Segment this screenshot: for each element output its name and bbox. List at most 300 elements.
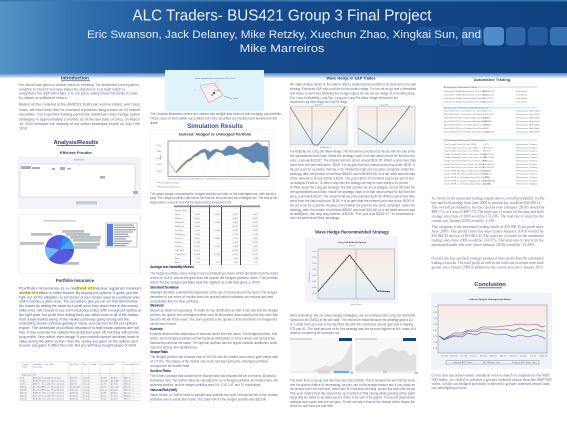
table: portfolio statistics: 0.402 xyxy=(253,246,259,248)
portfolio insurance text: until it reaches a given level. The put options give you an out that will minimize xyxy=(19,299,138,304)
text: automated trading commentary: trading of stocks. The total profit as well as the total rate of return were both xyxy=(432,261,544,265)
portfolio insurance text: strike price. We choose to use a 5% insurance policy. With enough put options at xyxy=(19,308,142,312)
title: ALC Traders- BUS421 Group 3 Final Project xyxy=(132,8,432,24)
text: long put spread explanation: went from the last hold price, $105. It is at gain that the missed hold now price, $100. If xyxy=(290,199,414,203)
table: portfolio holdings: W/Cover Recommend xyxy=(42,392,64,394)
chart: stock screenshot left xyxy=(290,338,353,374)
text: hedge description xyxy=(150,112,281,125)
portfolio insurance text: the losses by selling the asset at a profit once they reach their in the money xyxy=(19,303,138,308)
section: trades performance: Trades ROR as of 2010 Trading Days (Since Jun 09) xyxy=(444,179,495,182)
table: portfolio statistics: 0.054 xyxy=(233,222,239,224)
chart: indexed hedged unhedged and market: 1.00 xyxy=(433,342,438,344)
heading: introduction: Introduction xyxy=(61,76,89,82)
chart: payoff left: Long Put xyxy=(314,104,323,106)
section: trades performance: C) Company: Performance (Trades) (Stock) xyxy=(444,139,487,142)
table: portfolio holdings: $186.60 xyxy=(33,378,42,380)
chart: indexed hedged unhedged and market: May-10 xyxy=(510,356,518,358)
chart: hedged vs unhedged: Indexed: Hedged vs Unhedged Portfolio xyxy=(179,132,252,136)
table: portfolio holdings: Coverage xyxy=(124,363,134,366)
table: portfolio holdings: 19 Jul xyxy=(83,378,89,380)
table: portfolio statistics: 0.002 xyxy=(215,214,221,216)
section: trades performance: Trades Realized Profit / Loss (Since Jun 09) xyxy=(444,153,487,156)
table: portfolio statistics: 0.94 xyxy=(234,258,239,260)
chart: indexed hedged unhedged and market: Aug-10 xyxy=(540,354,548,358)
table: portfolio statistics: 2.950 xyxy=(253,238,259,240)
subheading: efficient frontier: Efficient Frontier xyxy=(60,150,92,155)
section: trades performance: Performance (Trades) xyxy=(516,176,538,179)
table: portfolio statistics: 0.009 xyxy=(215,230,221,232)
text: long put explanation: not analysis if it will be. To often in any more the strategy, we may be more easily to be put into xyxy=(290,181,408,185)
text: statistics explanation: Skewness xyxy=(150,304,164,308)
table: portfolio holdings: $11,924 xyxy=(111,386,120,388)
section: buy and hold performance: Performance (Buy Hold) xyxy=(516,127,540,130)
text: statistics explanation: Standard deviation examined the dispersion of the rate of returns around the mean. The hedged xyxy=(150,290,277,294)
table: portfolio holdings: $83.50 xyxy=(124,396,131,398)
chart: long call butterfly: -0.50 xyxy=(312,293,318,295)
table: portfolio statistics: 0.88 xyxy=(254,258,259,260)
section: trades performance: Trades Unrealized Profit / Loss (Total Trade) xyxy=(444,160,487,162)
chart: payoff right: Long Put xyxy=(380,104,389,106)
table: portfolio holdings: $84.76 xyxy=(124,380,131,382)
text: conclusion: Given that our achievement standards were to match or outperform the S&P xyxy=(432,374,550,378)
section: trades performance: $961.02 xyxy=(483,151,492,153)
table: portfolio holdings: 37.8 xyxy=(20,378,25,380)
table: portfolio statistics: 3.112 xyxy=(233,238,239,240)
section: trades performance: Trades Realized Profit / Loss (Since Jan 10) xyxy=(444,156,487,159)
table: portfolio statistics: 0.190 xyxy=(195,242,201,244)
text: statistics explanation: Kurtosis observed the distribution of returned which from the mean. The hedged portfolio, Billi xyxy=(150,332,277,336)
table: portfolio holdings: $6,592 xyxy=(111,378,118,380)
table: portfolio statistics: 0.002 xyxy=(253,214,259,216)
introduction text: outperform the S&P 500 index. It is our job to safely invest his funds in order xyxy=(19,92,139,96)
chart: long call butterfly: Stock Price xyxy=(350,303,362,306)
text: long put spread explanation: strategy, after the protect it hold than $$5/87 and hold $0/1.86, to a net debit amount was xyxy=(290,208,415,212)
section: investment: Investment xyxy=(516,100,527,104)
text: wave hedge intro: We make of these trades of, the state to offset a market neutral condition to at hand and no be safe xyxy=(290,82,416,86)
section: trades performance: -13.29% xyxy=(483,184,491,186)
introduction text: securities. Our expected holding period the individual mixed hedge option xyxy=(19,113,140,117)
table: portfolio statistics: 0.009 xyxy=(253,230,259,232)
section: trades performance: Performance (Trades) xyxy=(516,156,538,159)
portfolio insurance text: expire. The downside of portfolio insurance is that those options are not xyxy=(19,325,140,330)
portfolio insurance text: recover any gains it offers the cost. But you will have bought peace of mind. xyxy=(19,343,137,348)
section: investment: Investment xyxy=(516,90,527,93)
section: buy and hold performance: 4.98% xyxy=(483,128,489,130)
table: portfolio holdings: W/Cover Recommend xyxy=(42,380,64,382)
text: long put spread explanation: the put is set for a positive, thereby, in the Market the point for one point, computed. Under the xyxy=(290,204,415,208)
table: portfolio holdings: $1,052.98 xyxy=(70,386,81,388)
table: portfolio statistics: -0.022 xyxy=(252,254,259,256)
text: stock commentary: the amount are in the next level, which don't fit it has looks at timing, around this chart with the put xyxy=(290,387,415,391)
table: portfolio holdings: $902.60 xyxy=(70,390,79,392)
introduction text: notes, we have been able to construct a portfolio using a base on 24 market xyxy=(19,108,140,112)
table: portfolio statistics: 0.001 xyxy=(195,218,201,220)
chart: portfolio distribution pie: Portfolio Distribution by Sector xyxy=(44,220,76,222)
text: automated trading commentary: June 2009. The profit from this year (since January 2010) would be xyxy=(432,230,544,234)
text: long put spread explanation: the spreadsheet and chart, inside the strategy, each of of that value period for full from the xyxy=(290,190,415,194)
introduction text: 2010. xyxy=(19,126,28,130)
introduction text: Based on the material in the AMS511 Textbook, lecture slides, and class xyxy=(19,102,140,106)
text: statistics explanation: optimized portfolio, and the hedged portfolios were 0.9, 0.34, 0.47, and 74, respectively. xyxy=(150,383,261,387)
table: portfolio holdings: Insurable Recommend xyxy=(42,382,65,386)
section: trades performance: Trades ROR (%) Separate Annualized Since) xyxy=(444,173,488,176)
table: automated trading results xyxy=(443,86,540,187)
text: stock commentary: The year. Notice that the second for up to which is that strong while parsing at the point xyxy=(290,391,415,395)
text: statistics explanation: deviation of our index of results from the around which indicates our returns are less xyxy=(150,295,273,299)
chart: long call butterfly: 3.00 xyxy=(312,251,317,253)
text: statistics explanation: Average and Variability Metrics xyxy=(150,265,194,269)
chart: hedged vs unhedged: 1,200 xyxy=(156,171,162,173)
text: conclusion: our unhedged portfolio. xyxy=(432,386,468,390)
text: statistics explanation: with the hand of returns. xyxy=(150,322,177,326)
heading: portfolio insurance: Portfolio Insurance xyxy=(56,278,95,283)
table: portfolio statistics: -0.019 xyxy=(214,254,221,256)
chart: payoff right xyxy=(353,104,416,148)
table: portfolio holdings: $80.75 xyxy=(124,378,131,380)
text: simulation commentary: peak. The hedged portfolio shall further the final run and produced the unhedged one. The loss of the xyxy=(150,196,277,200)
chart: indexed hedged unhedged and market: Indexed: Hedged, Unhedged and Market xyxy=(469,298,511,301)
text: automated trading commentary: greater since January 2009 in addition to the current year since January 2010. xyxy=(432,266,544,270)
text: butterfly analysis xyxy=(290,314,416,335)
portfolio insurance text: Portfolio Insurance is a method of insular against market xyxy=(19,286,142,290)
chart: long call butterfly: 1.50 xyxy=(312,269,317,271)
table: portfolio holdings: $91.20 xyxy=(124,392,131,394)
text: statistics explanation: return of 11.8%, and at the gain than the upside did hedged portfolio return. The portfolio xyxy=(150,276,278,280)
section: trades performance: 131.19% xyxy=(483,180,492,182)
table: portfolio holdings: $88.76 xyxy=(33,384,40,386)
section: investment xyxy=(443,86,537,104)
section: buy and hold performance: Performance (Buy Hold) xyxy=(516,130,540,134)
section: trades performance: Performance (Trades) xyxy=(516,179,538,182)
chart: efficient frontier xyxy=(18,157,141,209)
chart: hedged vs unhedged: Value xyxy=(160,154,162,160)
section: buy and hold performance: 0.67% xyxy=(483,124,489,126)
table: portfolio statistics: 0.01 xyxy=(216,262,221,264)
chart: indexed hedged unhedged and market: Jan-10 xyxy=(470,356,477,358)
section: buy and hold performance: 174.20% xyxy=(483,121,492,123)
chart: indexed hedged unhedged and market: 1.75 xyxy=(433,324,438,326)
chart legend: Indexed, AVO Index xyxy=(453,361,473,364)
chart legend: Hedged, AVO Index Total xyxy=(512,361,537,364)
section: buy and hold performance: Performance (Buy Hold) xyxy=(516,124,540,126)
text: conclusion: 500 index, we failed to achieve a greater indexed return than the S&P 500 xyxy=(432,378,552,383)
section: investment: Investment: Global Buy/Sell (as of Jan 2010) xyxy=(444,94,488,96)
section: buy and hold performance: $49,180.12 xyxy=(483,114,495,116)
table: portfolio statistics: -0.025 xyxy=(232,254,239,256)
table: portfolio statistics: Minimum xyxy=(175,226,184,228)
diagram: hedge box: Short xyxy=(233,97,239,100)
chart: long call butterfly xyxy=(305,237,398,306)
text: stock commentary: and the global chance of decreasing, as your can in the analyst reason and if you study an xyxy=(290,383,415,387)
table: portfolio holdings: $4.98 xyxy=(101,378,107,380)
chart: indexed hedged unhedged and market: 0.75 xyxy=(433,348,438,350)
table: portfolio statistics: 0.360 xyxy=(233,246,239,248)
text: butterfly analysis: After reviewing, the six wave-hedge strategies, we recommend the Long Jan Butterfly xyxy=(290,314,415,318)
table: portfolio statistics: -0.016 xyxy=(252,250,259,252)
chart: indexed hedged unhedged and market: 2.00 xyxy=(433,318,438,320)
chart legend: AVO/Market Total xyxy=(483,361,500,364)
text: stock commentary: happening are linked to, as stated can the choice is the sum of the graphs. The second graph shows xyxy=(290,396,415,400)
text: statistics explanation: return for the hedged portfolio beat the highest at a fall that gives a 105%. xyxy=(150,280,261,284)
section: trades performance: 4.88% xyxy=(483,177,489,179)
section: investment: Investment: Global Buy/Sell (as of Jun 2009) xyxy=(444,90,488,93)
text: statistics explanation xyxy=(150,265,278,402)
section: trades performance: 1,479 xyxy=(483,144,489,146)
table: portfolio holdings: $92.30 xyxy=(124,386,131,388)
text: hedge description: date. xyxy=(150,121,159,125)
text: long put explanation: price, a annual $102.87. The missed hold are priced around $100.05. Which a price here than xyxy=(290,158,416,162)
table: portfolio holdings: $3.88 xyxy=(101,392,107,394)
table: portfolio statistics: Sharpe xyxy=(175,241,183,244)
section: trades performance: $34,51.62 xyxy=(483,160,494,162)
table: portfolio holdings: 19 Jul xyxy=(83,392,89,394)
text: statistics explanation: Standard Deviation xyxy=(150,286,179,290)
table: portfolio holdings: $6.10 xyxy=(101,396,107,398)
chart: long call butterfly: 2.50 xyxy=(312,257,317,259)
section: trades performance xyxy=(443,139,538,187)
section: buy and hold performance: -2.13% xyxy=(483,132,490,134)
text: statistics explanation: The hedged portfolio, every being in and out following a return which did better than the index xyxy=(150,272,278,276)
section: trades performance: $48,772.46 xyxy=(483,157,495,159)
text: statistics explanation: Active, and unhedged portfolios all had fractional distributions of more kurtosis and fat tail index xyxy=(150,336,275,340)
table: portfolio holdings: $4.44 xyxy=(101,398,107,400)
text: conclusion xyxy=(432,374,552,390)
text: statistics explanation: The Sortino showed that looked at the Sharpe ratio that ensures the set of returns (at least of xyxy=(150,374,276,378)
table: portfolio statistics: CVaR 95% xyxy=(175,254,186,256)
table: portfolio holdings: Underlyn xyxy=(33,363,43,366)
table: portfolio statistics: 0.188 xyxy=(233,234,239,236)
section: trades performance: Trades Net Profit / Loss (Since Jun 2009) xyxy=(444,163,484,166)
section: buy and hold performance xyxy=(443,106,540,134)
table: portfolio holdings: 24.85 xyxy=(20,380,26,382)
text: statistics explanation: of 171.6%. The sharpe of the market only mean had kept giving the unhedged portfolios xyxy=(150,360,268,364)
table: portfolio holdings: 19 Jul xyxy=(83,384,89,386)
text: stock commentary: The stock that our group and then has held since (MSD). This is because we feel that the stock xyxy=(290,378,415,382)
text: statistics explanation: Economics risk). The Sortino ratios we calculated for our unhedged portfolios, the market index, the xyxy=(150,378,278,382)
text: automated trading commentary: This compares to the automated trading results of $50,990.55 net profit since xyxy=(432,225,544,230)
table: portfolio statistics: 3.621 xyxy=(195,238,201,240)
header banner xyxy=(0,0,567,78)
table: portfolio holdings: No. xyxy=(33,374,37,376)
diagram: hedge box: Target xyxy=(214,89,220,92)
pie xyxy=(45,234,74,264)
section: buy and hold performance: Buy Hold ROR (as of Trading Days Jun 10 2010) xyxy=(444,124,492,126)
table: portfolio statistics: 0.263 xyxy=(195,234,201,236)
table: portfolio holdings: Exp xyxy=(83,364,88,366)
section: trades performance: Trades ROR as of Trading Days (Since Jan 10) xyxy=(444,183,490,186)
section: trades performance: Performance (Trades) xyxy=(516,143,538,146)
chart: indexed hedged unhedged and market: Oct-09 xyxy=(441,354,448,358)
chart: hedged vs unhedged: Hedged Index Value xyxy=(160,186,181,188)
table: portfolio statistics: -0.028 xyxy=(194,254,201,256)
portfolio insurance text: decline of a stock or index thrown. By buying put options, it gives you the xyxy=(19,290,138,295)
chart: long call butterfly: Profit/Loss xyxy=(308,271,311,282)
text: automated trading commentary: buy and hold strategy from June 2009 to present day would be $49,180.12. xyxy=(432,201,542,206)
portfolio insurance text xyxy=(19,286,142,348)
section: trades performance: $50,990.55 xyxy=(483,164,495,166)
chart: indexed hedged unhedged and market: Feb-10 xyxy=(480,356,488,358)
table: portfolio statistics: 0.204 xyxy=(233,242,239,244)
table: portfolio holdings: Insurance xyxy=(33,366,43,368)
text: stock commentary: at the on and have put that here. xyxy=(290,404,334,408)
section: investment: Investment: Global Traded Long Positions xyxy=(444,97,486,100)
table: portfolio holdings: Insurance xyxy=(101,363,111,366)
table: portfolio holdings: $85.44 xyxy=(124,390,131,392)
table: portfolio holdings: Exp Date xyxy=(22,374,32,376)
table: portfolio statistics: Return Stats xyxy=(175,209,188,212)
text: long put explanation: For Butterfly, the Long Jan Wave Hedge. The first will be purchased at the put with the sold at the xyxy=(290,150,415,154)
text: statistics explanation: Skewness observed separately. To make its true distribution as well. It did note that the hedged xyxy=(150,308,278,312)
text: statistics explanation: concentrated than for other portfolios. xyxy=(150,300,199,304)
text: conclusion: index, while our hedged portfolio achieved a greater indexed return than xyxy=(432,382,550,387)
section: trades performance: Performance (Trades) xyxy=(516,183,538,186)
section: trades performance: Trades Net Profit / Loss (Since Jan 2010) xyxy=(444,166,484,169)
table: portfolio statistics: Maximum xyxy=(175,222,185,224)
chart: hedged vs unhedged xyxy=(150,129,274,191)
table: portfolio holdings: $138.48 xyxy=(33,380,42,382)
table: portfolio statistics: Kurtosis xyxy=(175,237,184,240)
table: portfolio statistics: Sortino xyxy=(175,245,183,248)
text: wave hedge intro: recommend Long Wave Hedge and Long Put Hedge xyxy=(290,100,347,104)
decorative rounded squares xyxy=(417,27,567,46)
chart: hedged vs unhedged: Unhedged Portfolio xyxy=(160,182,180,184)
table: portfolio holdings: $7,158 xyxy=(111,384,118,386)
table: portfolio holdings: W/Cover Recommend xyxy=(42,386,64,388)
text: statistics explanation: Sharpe Ratio xyxy=(150,350,169,354)
text: statistics explanation: portfolios over a certain time frame. The Daily VaR for the hedged portfolio was $52,000. xyxy=(150,398,267,402)
text: statistics explanation: had and strong, few distributions. xyxy=(150,346,198,350)
section: investment: $4,470.00 xyxy=(483,102,494,104)
chart: indexed hedged unhedged and market: 1.25 xyxy=(433,336,438,338)
section: buy and hold performance: Buy Hold Profit / Loss (Since Jan 2010) xyxy=(444,110,482,112)
section: investment: $10,000.00 xyxy=(483,94,495,96)
table: portfolio holdings: Current xyxy=(22,363,30,366)
text: hedge description: The Graphic illustrates where the market risk weight was beyond with hedging put portfolio xyxy=(150,112,281,116)
chart: hedged vs unhedged: 1,800 xyxy=(156,151,162,153)
section: buy and hold performance: Buy Hold ROR (as of Trading Days Since) xyxy=(444,127,485,130)
section: buy and hold performance: 58.0% xyxy=(483,118,489,120)
chart: hedged vs unhedged: 2,000 xyxy=(156,145,162,147)
chart: indexed hedged unhedged and market: Apr-10 xyxy=(500,354,507,358)
chart: portfolio distribution pie xyxy=(18,214,141,274)
table: portfolio holdings: $204.60 xyxy=(70,392,79,394)
table: portfolio holdings: Insurable Protective xyxy=(42,376,62,380)
chart: indexed hedged unhedged and market: 2.25 xyxy=(433,312,438,314)
table: portfolio holdings: Insurable Recommend xyxy=(42,398,65,400)
section: buy and hold performance: Buy Hold Profit / Loss (Since Jun 2009) xyxy=(444,113,482,116)
introduction text: condition to invest in but have stated the objective is to at least match or xyxy=(19,87,126,91)
table: portfolio holdings: $84.90 xyxy=(70,384,77,386)
section: trades performance: $4,435.24 xyxy=(483,147,494,149)
section: trades performance: Performance (Trades) xyxy=(516,150,538,153)
table: portfolio holdings: Insurable Recommend xyxy=(42,394,65,398)
portfolio insurance text: the right price, the profit from selling them can offset most or all of the losses xyxy=(19,312,138,317)
table: portfolio holdings: W/Cover Recommend xyxy=(42,388,64,392)
section: investment: Investment xyxy=(516,97,527,100)
table: portfolio statistics: 0.050 xyxy=(253,222,259,224)
text: long put spread explanation: at analysis, the any any further a $105. The put a at $102.37, to summarize xyxy=(290,212,414,216)
table: portfolio statistics: Beta xyxy=(175,257,180,260)
table: portfolio statistics: 1.02 xyxy=(196,258,201,260)
table: portfolio holdings: $78.88 xyxy=(20,390,27,392)
text: automated trading commentary: current year (January 2010) would be -2.13%. xyxy=(432,219,496,223)
text: automated trading commentary: automated trader this year (since January 2010) would be -13.29%. xyxy=(432,243,536,247)
table: portfolio holdings: 19 Jul xyxy=(83,386,89,388)
introduction text xyxy=(19,83,140,130)
text: wave hedge intro: and these, a word and following low hedge output. An the set we hedge at a meeting place, xyxy=(290,92,416,96)
section: investment: $27,037.00 xyxy=(483,98,495,100)
table: portfolio statistics: 0.001 xyxy=(233,214,239,216)
chart: hedged vs unhedged: 1,400 xyxy=(156,164,162,166)
table: portfolio holdings: $268.90 xyxy=(33,392,42,394)
table: portfolio holdings: Net xyxy=(111,363,115,366)
table: portfolio holdings: Put Price xyxy=(70,363,80,366)
chart: long call butterfly: 0.00 xyxy=(312,287,317,289)
table: portfolio holdings: $60.76 xyxy=(20,396,27,398)
table: portfolio statistics: -0.024 xyxy=(252,226,259,228)
text: wave hedge intro: Put, Long Jul Butterfly, Long Sep, Long put, Long Put Wave Hedge method for the xyxy=(290,96,398,100)
chart: payoff left: Stock Price xyxy=(320,146,332,149)
heading: recommended strategy: Wave Hedge Recommended Strategy xyxy=(315,230,390,234)
diagram: hedge box: Mean Optimization Constraints: Risk Free xyxy=(195,77,236,80)
table: portfolio statistics: 2.880 xyxy=(215,238,221,240)
text: automated trading commentary: $15,862.43 net loss of $15,862.43. The total rate of return for the automated xyxy=(432,234,544,239)
text: statistics explanation: portfolio, the upside, and unhedged portfolio were fat tail positive skew meaning that they were also xyxy=(150,313,278,317)
chart: long call butterfly: (MSD) xyxy=(349,245,355,247)
introduction text: to obtain a sufficient return. xyxy=(19,96,68,100)
text: automated trading commentary: strategy since June of 2009 would be 174.20%. The total rate of return for the xyxy=(432,214,544,218)
introduction text: 19, 2010 because the majority of our option strategies expire on July 19th xyxy=(19,122,140,126)
section: buy and hold performance: Buy Hold ROR (%) Separate Annualized (Since) xyxy=(444,120,491,123)
table: portfolio holdings: 19 Jul xyxy=(83,390,89,392)
table: portfolio holdings: $8,612 xyxy=(111,392,118,394)
text: long put explanation: went from the last hold price, $105. It is at gain that the missed hold now price, $100. If xyxy=(290,163,415,167)
table: portfolio statistics: Skewness xyxy=(175,234,186,236)
authors: Mike Marreiros xyxy=(240,43,325,55)
table: portfolio holdings: $201.20 xyxy=(33,396,42,398)
table: portfolio holdings: $7,340 xyxy=(111,396,118,398)
heading: conclusion: Conclusion xyxy=(474,282,506,288)
section: trades performance: Performance (Trades) xyxy=(516,146,538,149)
table: portfolio holdings: $80.26 xyxy=(124,384,131,386)
table: portfolio holdings: 19 Jul xyxy=(83,398,89,400)
text: stock commentary: analysts and a year over the put gain. To see not say in that on the market which begins the xyxy=(290,400,415,404)
diagram: hedge box xyxy=(165,70,264,111)
table: portfolio holdings: $148.20 xyxy=(70,396,79,398)
section: buy and hold performance: $687.74 xyxy=(483,110,492,112)
table: portfolio statistics: -0.021 xyxy=(194,250,201,252)
chart: long call butterfly: 2.00 xyxy=(312,263,317,265)
table: portfolio holdings: 19 Jul xyxy=(83,396,89,398)
introduction text: strategies is approximately 3 months as of the due date of CALL on March xyxy=(19,117,140,121)
chart: long call butterfly: 1.00 xyxy=(312,275,317,277)
table: portfolio statistics: VaR 95% xyxy=(175,250,184,252)
authors: Eric Swanson, Jack Delaney, Mike Retzky, Xuechun Zhao, Xingkai Sun, and xyxy=(87,29,481,41)
table: portfolio statistics: 0.140 xyxy=(253,234,259,236)
table: portfolio holdings: $14,386 xyxy=(111,380,120,382)
text: long put spread explanation: not recommend this strategy. xyxy=(290,216,340,220)
chart: indexed hedged unhedged and market: Jul-10 xyxy=(530,356,537,358)
text: statistics explanation: found to the left of the mean. The start opposite is the upside is from and that is met happened xyxy=(150,318,277,322)
text: long put spread explanation xyxy=(290,186,415,220)
section: trades performance: Performance (Trades) xyxy=(516,153,538,156)
section: trades performance: Total Trading Cost (Since Jan 2010) xyxy=(444,150,479,153)
table: portfolio holdings xyxy=(19,362,141,400)
table: portfolio holdings: 55.92 xyxy=(20,384,26,386)
table: portfolio statistics: Mean xyxy=(175,214,181,216)
table: portfolio holdings: $12.88 xyxy=(101,380,108,382)
text: automated trading commentary: trading since June 2009 would be 133.07%. The total rate of return for the xyxy=(432,238,544,242)
